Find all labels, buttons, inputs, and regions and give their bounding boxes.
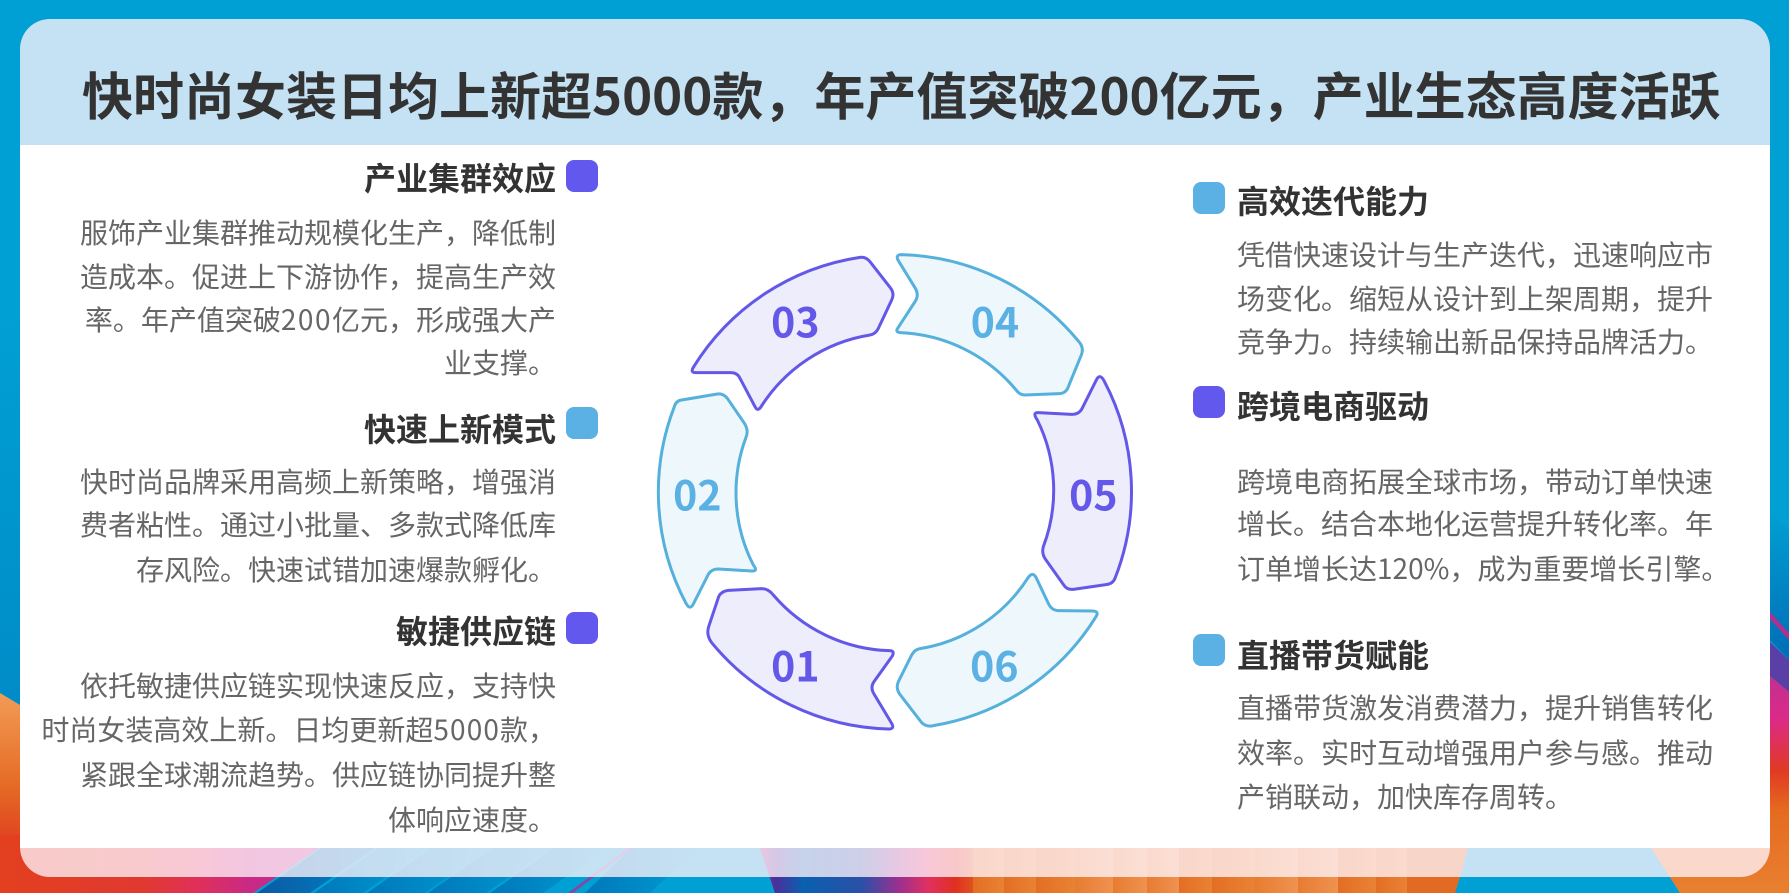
chart: six-segment cycle ring [656, 253, 1133, 730]
panel: 高效迭代能力: 场变化。缩短从设计到上架周期，提升 [1237, 278, 1713, 318]
panel: 快速上新模式: 费者粘性。通过小批量、多款式降低库 [80, 504, 556, 544]
panel: 跨境电商驱动: 跨境电商驱动 [1237, 382, 1429, 428]
panel: 敏捷供应链: 依托敏捷供应链实现快速反应，支持快 [80, 665, 556, 705]
segment 06: 06 [970, 634, 1019, 694]
panel: 快速上新模式: 快时尚品牌采用高频上新策略，增强消 [80, 461, 556, 501]
segment 01 [708, 589, 893, 729]
panel: 产业集群效应 [80, 154, 598, 382]
panel: 敏捷供应链 [41, 607, 598, 839]
panel: 跨境电商驱动: 订单增长达120%，成为重要增长引擎。 [1237, 548, 1729, 588]
panel: 快速上新模式 [80, 405, 598, 589]
panel: 高效迭代能力: 高效迭代能力 [1237, 177, 1429, 223]
panel: 直播带货赋能: 直播带货激发消费潜力，提升销售转化 [1237, 687, 1713, 727]
panel: 直播带货赋能 [1193, 631, 1713, 816]
panel: 产业集群效应: 造成本。促进上下游协作，提高生产效 [80, 256, 556, 296]
segment 02 [658, 394, 755, 607]
panel: 高效迭代能力: 凭借快速设计与生产迭代，迅速响应市 [1237, 234, 1713, 274]
panel: 跨境电商驱动 [1193, 382, 1729, 588]
card: white content area [20, 145, 1770, 848]
segment 04 [897, 255, 1082, 395]
panel: 高效迭代能力 [1193, 177, 1713, 361]
panel: 产业集群效应: 业支撑。 [444, 342, 556, 382]
segment 06 [897, 574, 1097, 726]
panel: 敏捷供应链: 敏捷供应链 [396, 607, 556, 653]
segment 04: 04 [971, 290, 1019, 350]
panel: 产业集群效应: 服饰产业集群推动规模化生产，降低制 [80, 212, 556, 252]
panel: 高效迭代能力: 竞争力。持续输出新品保持品牌活力。 [1237, 321, 1713, 361]
panel: 快速上新模式: 存风险。快速试错加速爆款孵化。 [136, 549, 556, 589]
segment 01: 01 [771, 634, 820, 694]
panel: 跨境电商驱动: 增长。结合本地化运营提升转化率。年 [1237, 503, 1713, 543]
segment 05 [1035, 377, 1131, 589]
panel: 敏捷供应链: 时尚女装高效上新。日均更新超5000款， [41, 709, 556, 749]
segment 02: 02 [673, 462, 722, 522]
panel: 直播带货赋能: 直播带货赋能 [1237, 631, 1429, 677]
panel: 直播带货赋能: 产销联动，加快库存周转。 [1237, 776, 1573, 816]
segment 03 [692, 257, 893, 409]
title: 快时尚女装日均上新超5000款，年产值突破200亿元，产业生态高度活跃 [82, 56, 1721, 130]
panel: 产业集群效应: 率。年产值突破200亿元，形成强大产 [85, 299, 556, 339]
panel: 直播带货赋能: 效率。实时互动增强用户参与感。推动 [1237, 732, 1713, 772]
panel: 敏捷供应链: 紧跟全球潮流趋势。供应链协同提升整 [80, 754, 556, 794]
panel: 快速上新模式: 快速上新模式 [364, 405, 556, 451]
panel: 产业集群效应: 产业集群效应 [364, 154, 556, 200]
panel: 敏捷供应链: 体响应速度。 [388, 799, 556, 839]
segment 05: 05 [1069, 462, 1118, 522]
panel: 跨境电商驱动: 跨境电商拓展全球市场，带动订单快速 [1237, 461, 1713, 501]
segment 03: 03 [771, 290, 820, 350]
